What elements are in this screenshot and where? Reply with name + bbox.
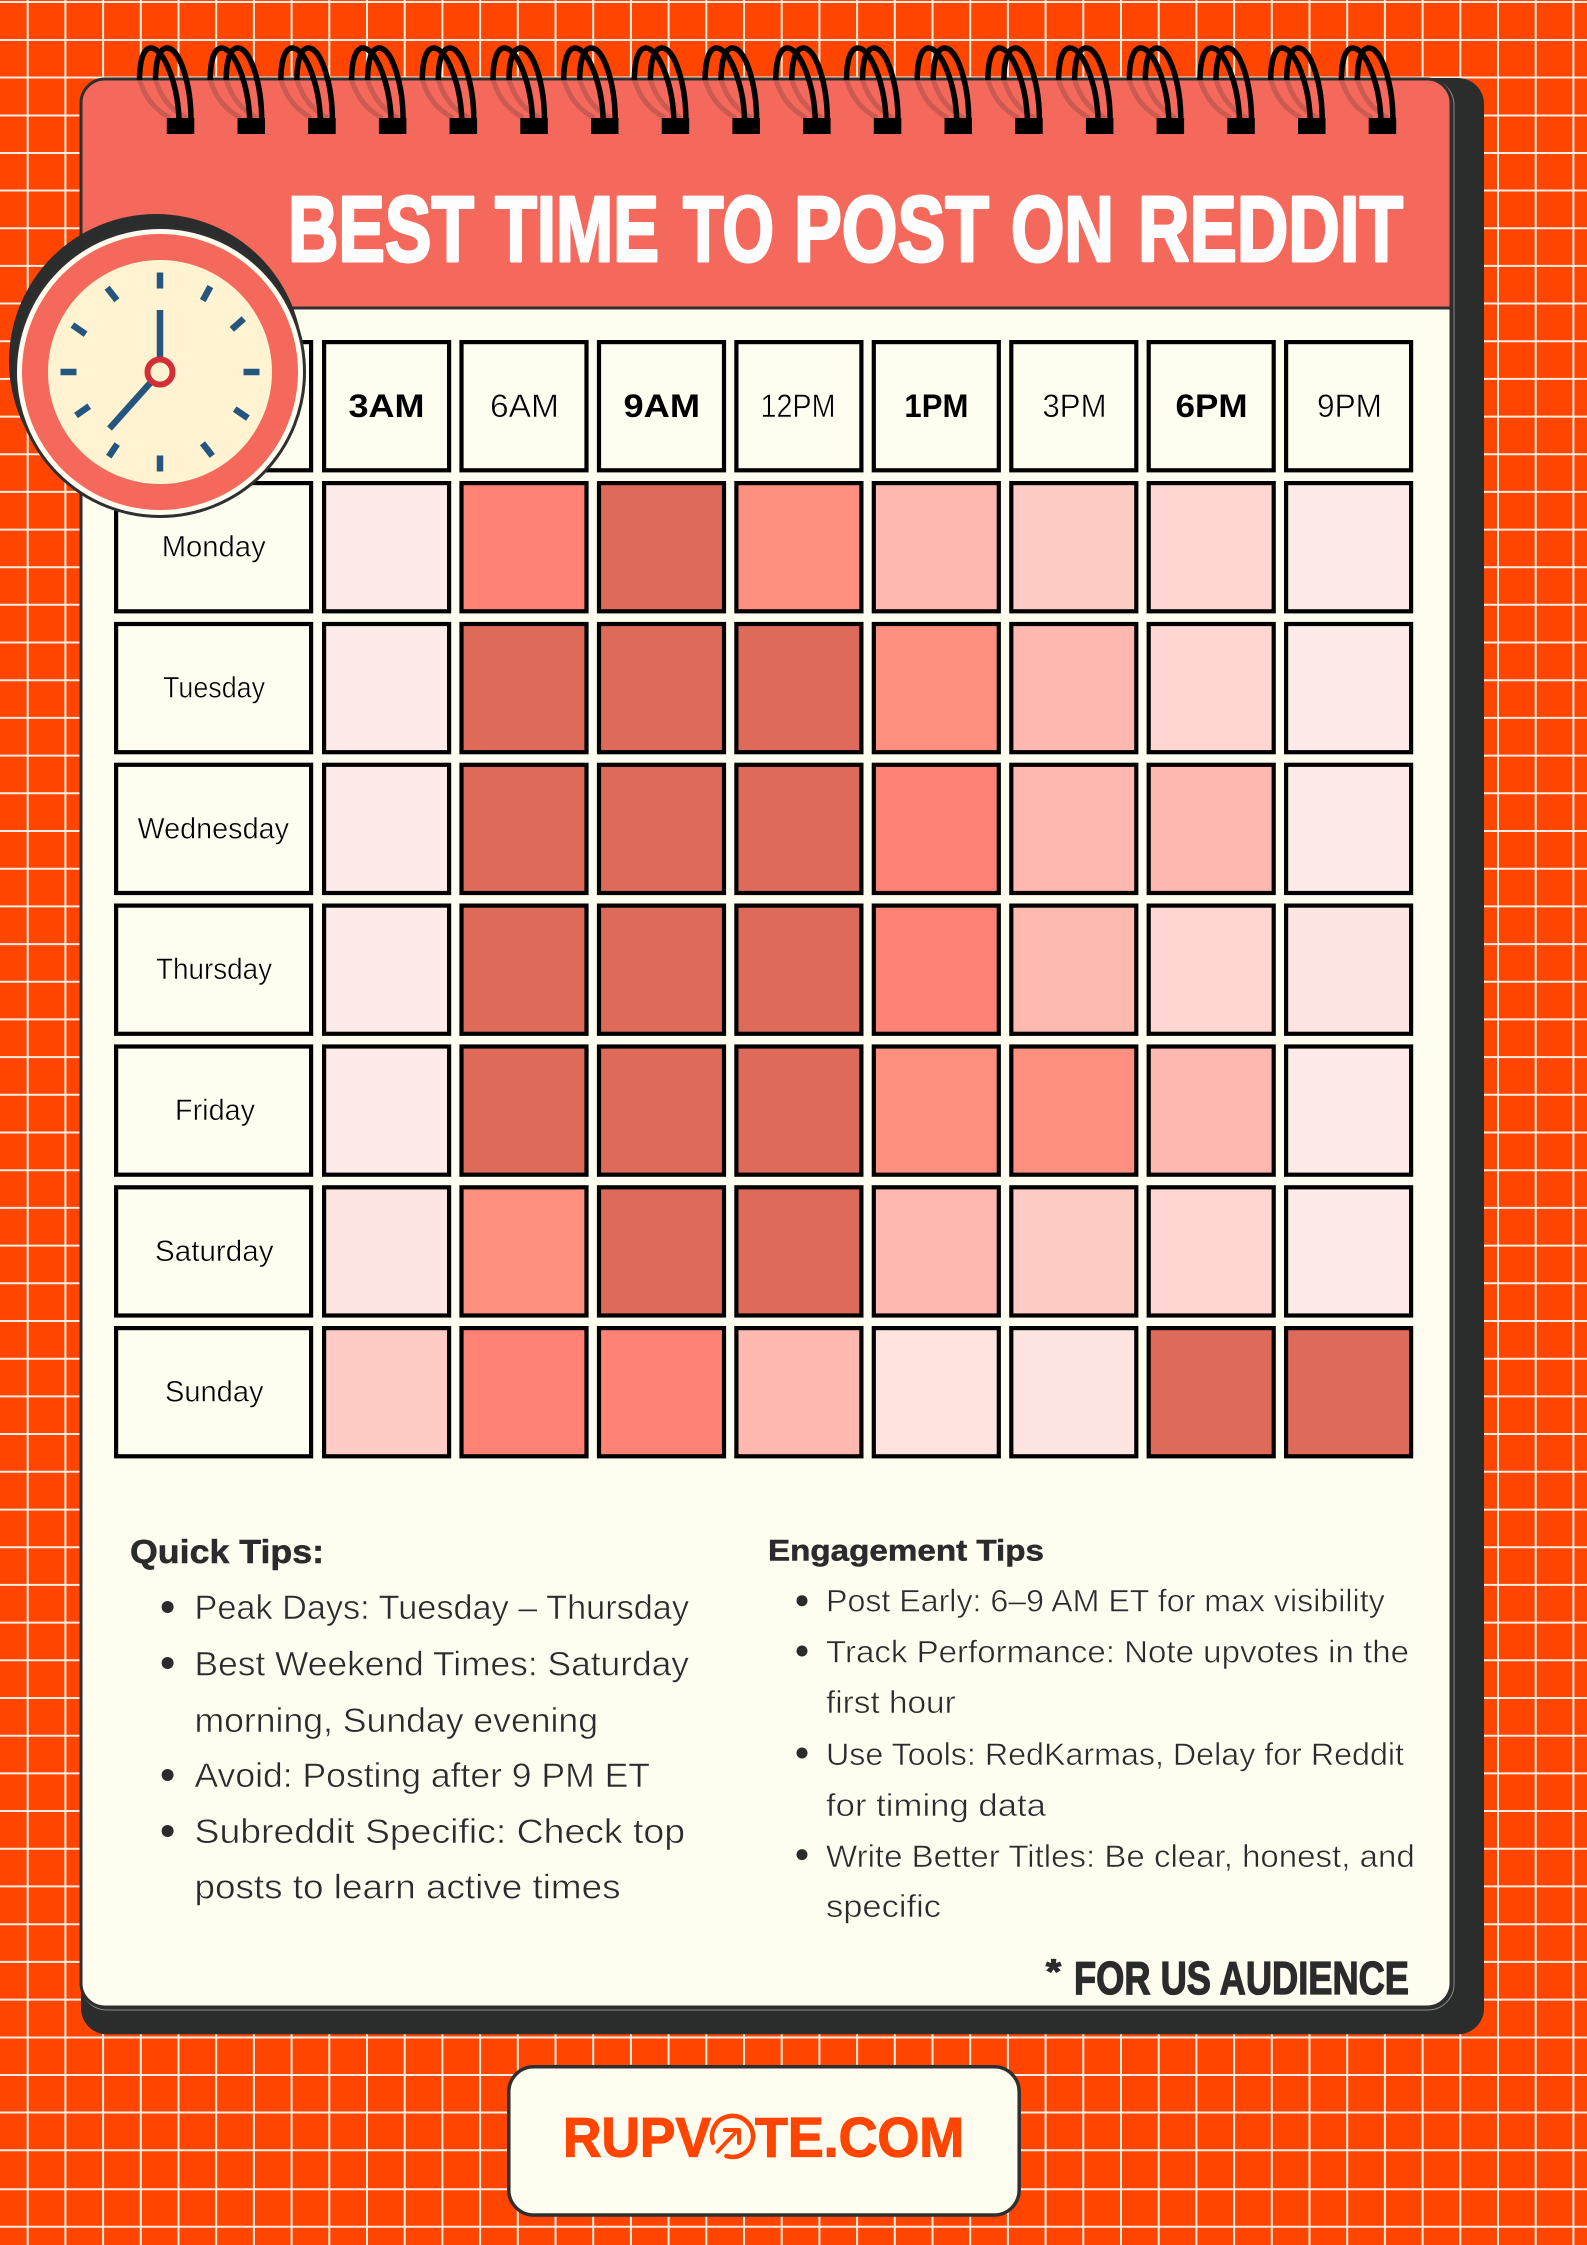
- table: time header row: [116, 342, 1411, 470]
- row: Sunday: [116, 1328, 1411, 1456]
- row: Sunday: Sunday: [165, 1376, 264, 1409]
- list: quick tips: morning, Sunday evening: [194, 1702, 598, 1740]
- row: Wednesday: [116, 765, 1411, 893]
- title: BEST: [288, 177, 474, 281]
- table: time header row: 1PM: [904, 388, 968, 424]
- table: time header row: 9AM: [624, 388, 700, 424]
- title: [288, 177, 1403, 281]
- row: Friday: [116, 1046, 1411, 1175]
- note: for US audience: *: [1046, 1953, 1062, 1991]
- footer: rupvote.com badge: TE.COM: [755, 2106, 964, 2169]
- notebook outline: [81, 79, 1451, 2007]
- row: Saturday: Saturday: [155, 1235, 274, 1268]
- list: engagement tips: Track Performance: Note upvotes in the: [826, 1634, 1409, 1670]
- title: POST: [794, 177, 989, 281]
- row: Tuesday: Tuesday: [163, 672, 265, 705]
- footer: rupvote.com badge: [509, 2067, 1019, 2215]
- table: time header row: 6PM: [1176, 388, 1248, 424]
- title: ON: [1011, 177, 1114, 281]
- list: quick tips: Avoid: Posting after 9 PM ET: [194, 1757, 650, 1795]
- table: time header row: 6AM: [490, 388, 559, 424]
- title: TIME: [495, 177, 659, 281]
- row: Monday: [116, 483, 1411, 611]
- table: time header row: 12PM: [760, 388, 836, 424]
- list: quick tips: Peak Days: Tuesday – Thursday: [194, 1589, 690, 1627]
- table: time header row: 3PM: [1042, 388, 1106, 424]
- list: quick tips: Best Weekend Times: Saturday: [194, 1646, 690, 1684]
- heading: Quick Tips: Quick Tips:: [130, 1533, 324, 1570]
- row: Friday: Friday: [175, 1094, 255, 1127]
- header band: [81, 79, 1451, 308]
- spiral binding: [140, 48, 1396, 134]
- row: Thursday: [116, 906, 1411, 1034]
- note: for US audience: FOR US AUDIENCE: [1074, 1952, 1409, 2004]
- table: time header row: 3AM: [348, 388, 424, 424]
- row: Monday: Monday: [162, 531, 266, 564]
- list: engagement tips: Use Tools: RedKarmas, Delay for Reddit: [826, 1736, 1404, 1772]
- notebook shadow: [81, 78, 1484, 2034]
- row: Thursday: Thursday: [156, 953, 272, 986]
- footer: rupvote.com badge: RUPV: [563, 2106, 711, 2169]
- icon: wall clock: [9, 214, 304, 516]
- title: REDDIT: [1138, 177, 1403, 281]
- heading: Engagement Tips: Engagement Tips: [768, 1535, 1044, 1568]
- list: quick tips: [162, 1589, 690, 1907]
- list: quick tips: Subreddit Specific: Check top: [194, 1813, 685, 1851]
- list: engagement tips: specific: [826, 1888, 941, 1924]
- list: quick tips: posts to learn active times: [194, 1869, 620, 1907]
- title: TO: [683, 177, 774, 281]
- list: engagement tips: [796, 1582, 1415, 1924]
- list: engagement tips: Post Early: 6–9 AM ET for max visibility: [826, 1582, 1385, 1618]
- list: engagement tips: first hour: [826, 1684, 956, 1720]
- icon: upvote arrow in circle: [712, 2116, 753, 2157]
- table: time header row: 9PM: [1317, 388, 1382, 424]
- row: Tuesday: [116, 624, 1411, 752]
- list: engagement tips: for timing data: [826, 1787, 1047, 1823]
- row: Wednesday: Wednesday: [138, 812, 289, 845]
- list: engagement tips: Write Better Titles: Be clear, honest, and: [826, 1838, 1415, 1874]
- row: Saturday: [116, 1187, 1411, 1316]
- notebook page: [81, 79, 1454, 2010]
